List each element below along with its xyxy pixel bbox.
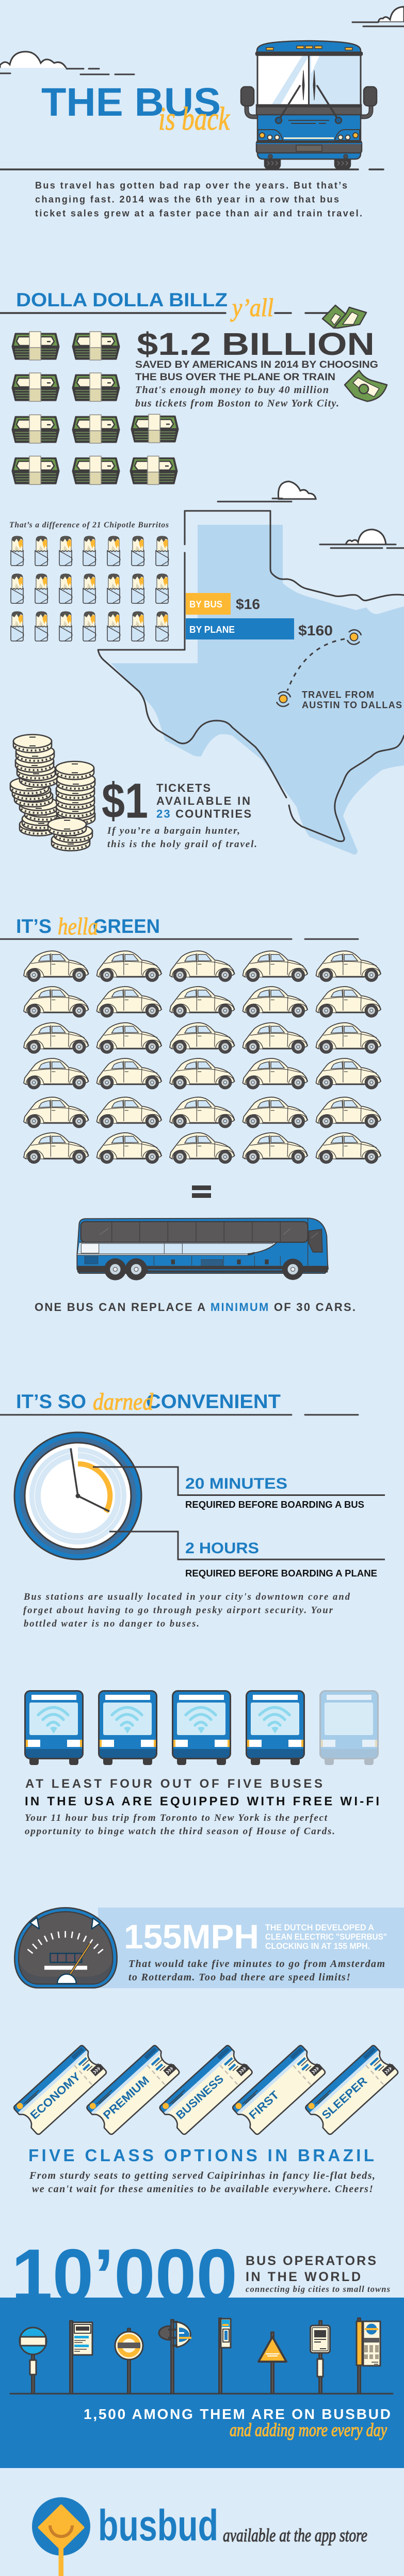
callout: 2 hours: REQUIRED BEFORE BOARDING A PLANE [185,1568,377,1579]
stat: $1 tickets: this is the holy grail of travel. [107,839,257,850]
heading: hella green: hella [58,913,98,940]
clock [14,1432,141,1559]
text: bus operators [246,2254,390,2294]
map: texas [98,511,404,854]
heading: dolla dolla billz: y’all [230,293,273,322]
stat: 1.2 billion: $1.2 BILLION [137,326,375,362]
stat: 155 mph: CLOCKING IN AT 155 MPH. [265,1941,370,1951]
price bars: $160 [298,622,333,638]
intro text: Bus travel has gotten bad rap over the years. But that’s [35,180,347,191]
stat: 155 mph: That would take five minutes to go from Amsterdam [128,1958,385,1970]
cloud left [0,52,134,74]
text: wifi: opportunity to binge watch the third season of House of Cards. [25,1826,335,1837]
heading: hella green [0,913,358,940]
money stacks [12,332,178,485]
callout: 2 hours [109,1532,385,1579]
tickets row [13,2044,399,2135]
cloud in texas [320,529,404,548]
text: wifi: IN THE USA ARE EQUIPPED WITH FREE WI-FI [25,1794,379,1808]
logo: busbud [32,2497,218,2576]
heading: hella green: IT’S [16,916,52,938]
paragraph: stations: bottled water is no danger to buses. [24,1619,199,1629]
paragraph: stations: Bus stations are usually located in your city's downtown core and [23,1592,350,1602]
icon: banknote [345,370,387,401]
text: class options: From sturdy seats to getting served Caipirinhas in fancy lie-flat beds, [29,2170,375,2181]
panel: blue band [0,2298,404,2468]
callout: 20 minutes: 20 MINUTES [185,1475,287,1492]
ticket: sleeper [304,2044,399,2135]
text: class options [28,2146,375,2195]
ticket: premium [86,2044,180,2135]
price bars [186,593,333,639]
text: wifi: Your 11 hour bus trip from Toronto to New York is the perfect [25,1813,328,1823]
route: austin to dallas: TRAVEL FROM [302,690,374,700]
text: busbud count: 1,500 AMONG THEM ARE ON BUSBUD [84,2406,391,2422]
icon row: wifi buses [25,1691,378,1765]
text: class options: we can't wait for these amenities to be available everywhere. Cheers! [32,2183,373,2195]
heading: darned convenient: CONVENIENT [146,1391,281,1413]
heading: dolla dolla billz: DOLLA DOLLA BILLZ [16,289,228,310]
caption: one bus: ONE BUS CAN REPLACE A MINIMUM OF 30 CARS. [35,1301,355,1314]
stop 6 [258,2332,286,2394]
stat: $1 tickets: If you’re a bargain hunter, [107,825,240,836]
text: class options: FIVE CLASS OPTIONS IN BRAZIL [28,2146,374,2165]
car grid [24,951,381,1163]
stat: $1 tickets: TICKETS [156,782,211,794]
stat: 1.2 billion: THE BUS OVER THE PLANE OR TRAIN [135,372,335,383]
stop 3 [115,2329,143,2394]
burrito caption: That’s a difference of 21 Chipotle Burritos [9,521,169,529]
stop 2 [70,2321,92,2394]
text: busbud count [84,2406,391,2440]
paragraph: stations [23,1592,350,1629]
stat: 1.2 billion: That's enough money to buy 40 million [135,384,329,396]
stat: $1 tickets: $1 [102,773,148,829]
price bars: $16 [236,596,260,612]
route: austin to dallas: AUSTIN TO DALLAS [302,700,402,710]
ticket: first [232,2044,326,2135]
stat: $1 tickets [102,773,257,850]
burrito grid [11,536,169,641]
icon: coin stacks [10,735,95,851]
ticket: sleeper: SLEEPER [319,2074,369,2122]
stat: $1 tickets: 23 COUNTRIES [156,807,251,820]
heading: darned convenient: IT’S SO [16,1391,86,1413]
callout: 2 hours: 2 HOURS [185,1540,259,1557]
cloud middle [218,481,316,502]
title: THE BUS [41,80,221,124]
ticket: business: BUSINESS [173,2072,226,2122]
stat: 1.2 billion [135,326,378,409]
heading: darned convenient: darned [93,1388,153,1415]
heading: hella green: GREEN [93,916,160,938]
ground line [10,2393,393,2395]
text: bus operators: IN THE WORLD [246,2270,361,2284]
text: bus operators: connecting big cities to small towns [246,2284,390,2294]
logo: busbud: busbud [98,2501,218,2550]
price bars: BY PLANE [189,625,235,635]
intro text: ticket sales grew at a faster pace than air and train travel. [35,208,362,218]
heading: darned convenient [0,1388,358,1415]
paragraph: stations: forget about having to go through pesky airport security. Your [23,1605,333,1616]
stop 8 [357,2318,380,2394]
text: bus operators: BUS OPERATORS [246,2254,376,2268]
icon: bus side view [77,1218,328,1281]
ticket: economy [13,2044,107,2135]
icon: bus front [241,41,377,169]
stop 1 [20,2328,46,2394]
stat: 155 mph: to Rotterdam. Too bad there are speed limits! [128,1972,350,1983]
icon: speedometer [14,1908,117,1988]
text: wifi: AT LEAST FOUR OUT OF FIVE BUSES [25,1777,322,1791]
callout: 20 minutes [93,1467,385,1510]
stat: 1.2 billion: bus tickets from Boston to New York City. [135,398,339,409]
stop 4 [159,2320,191,2394]
stat: 155 mph: THE DUTCH DEVELOPED A [265,1923,374,1932]
stat: 1.2 billion: SAVED BY AMERICANS IN 2014 BY CHOOSING [135,360,378,370]
stat: 155 mph [124,1917,387,1983]
stat: 155 mph: CLEAN ELECTRIC "SUPERBUS" [265,1932,387,1942]
route: austin to dallas [277,630,402,710]
stat: 155 mph: 155MPH [124,1917,259,1956]
ticket: economy: ECONOMY [28,2070,83,2122]
road line [0,168,383,170]
equals sign [192,1185,211,1198]
text: wifi [25,1777,379,1837]
ticket: business [159,2044,253,2135]
stat: 10,000 numeral: 10’000 [11,2234,237,2317]
callout: 20 minutes: REQUIRED BEFORE BOARDING A BUS [185,1500,364,1510]
ticket: premium: PREMIUM [101,2073,152,2122]
title: is back [158,100,230,137]
icon: flying banknote [322,305,366,328]
cloud top right [352,7,404,26]
intro text [35,180,362,218]
ticket: first: FIRST [247,2088,282,2122]
intro text: changing fast. 2014 was the 6th year in a row that bus [35,194,339,205]
price bars: BY BUS [189,599,222,610]
stop 5 [219,2318,231,2394]
panel: speed band [98,1908,404,1988]
stop 7 [311,2321,330,2394]
heading: dolla dolla billz [0,289,330,322]
stat: $1 tickets: AVAILABLE IN [156,794,250,807]
bus stop signs [20,2318,380,2394]
